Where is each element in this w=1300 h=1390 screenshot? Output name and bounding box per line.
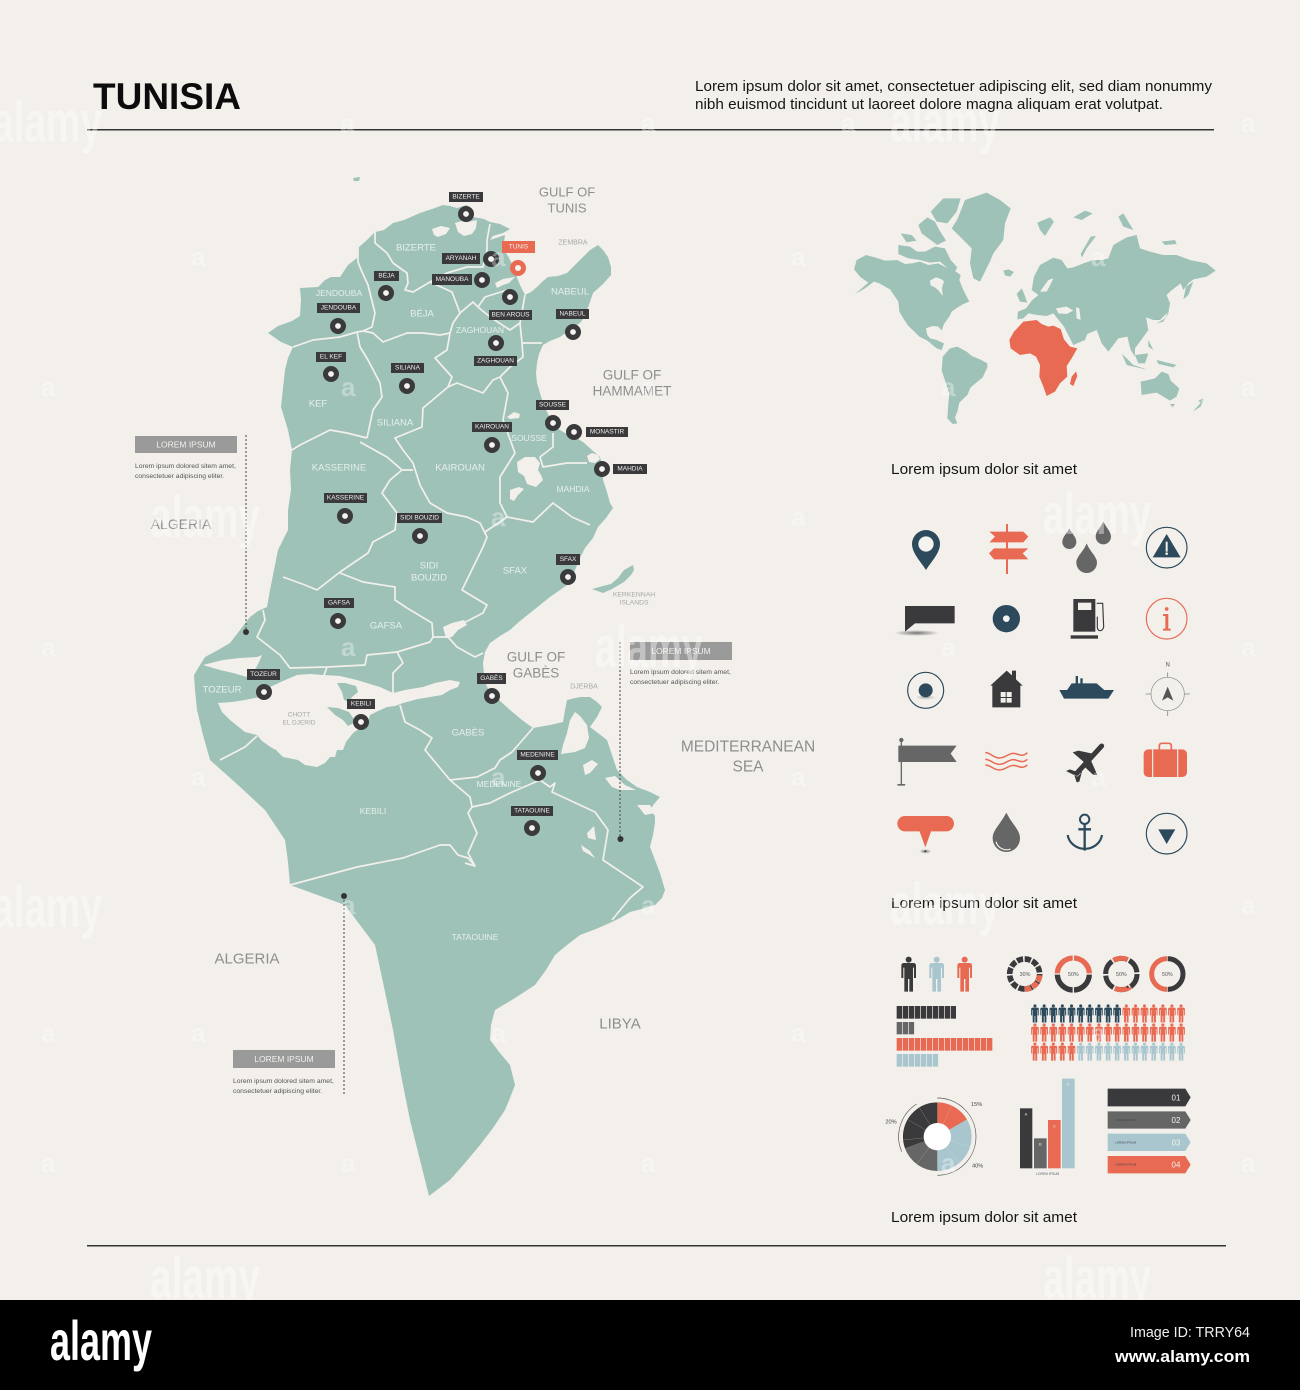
segmented bars bbox=[897, 1005, 992, 1067]
icon: target bbox=[908, 672, 944, 708]
marker: Ben Arous: BEN AROUS bbox=[492, 312, 530, 318]
marker: Manouba: MANOUBA bbox=[436, 276, 469, 283]
sea and neighbour names: KERKENNAH bbox=[613, 592, 655, 598]
intro text: nibh euismod tincidunt ut laoreet dolore magna aliquam erat volutpat. bbox=[695, 97, 1163, 113]
marker: Monastir bbox=[566, 424, 628, 440]
intro text: Lorem ipsum dolor sit amet, consectetuer adipiscing elit, sed diam nonummy bbox=[695, 79, 1213, 95]
footer bar bbox=[0, 1300, 1300, 1390]
watermarks: a bbox=[1241, 108, 1256, 138]
donut: 50% half: 50% bbox=[1162, 972, 1173, 978]
callout: east: consectetuer adipiscing eliter. bbox=[630, 679, 719, 686]
icon: fuel pump bbox=[1071, 599, 1104, 639]
watermarks: a bbox=[941, 632, 956, 662]
arrow 04 bbox=[1108, 1156, 1191, 1173]
icon: disc bbox=[993, 605, 1020, 632]
hudson bay bbox=[930, 277, 944, 296]
australia bbox=[1141, 372, 1203, 412]
callout: south bbox=[233, 893, 347, 1095]
people grid bbox=[1031, 1004, 1185, 1061]
region names: NABEUL bbox=[551, 286, 589, 298]
region names: SIDI bbox=[420, 560, 438, 572]
marker: Medenine: MEDENINE bbox=[520, 752, 555, 758]
marker: Sousse bbox=[536, 400, 569, 431]
icon: suitcase bbox=[1144, 743, 1187, 777]
sea and neighbour names: EL DJERID bbox=[282, 720, 316, 726]
arrow 03 bbox=[1108, 1134, 1191, 1151]
donut: 50% half bbox=[1152, 959, 1183, 989]
marker: Kasserine: KASSERINE bbox=[327, 494, 365, 502]
lakes and lagoons bbox=[432, 220, 655, 858]
sea and neighbour names: DJERBA bbox=[570, 684, 598, 690]
marker: Tunis capital bbox=[502, 241, 535, 276]
watermarks: a bbox=[491, 502, 506, 532]
south america bbox=[942, 347, 987, 424]
icon set bbox=[894, 522, 1190, 854]
caption: icons: Lorem ipsum dolor sit amet bbox=[891, 896, 1077, 912]
watermarks: alamy bbox=[595, 615, 703, 680]
watermarks: a bbox=[1091, 762, 1106, 792]
icon: flag bbox=[897, 738, 957, 786]
bar chart bbox=[1020, 1079, 1075, 1176]
marker: Mahdia bbox=[594, 461, 647, 477]
watermarks: alamy bbox=[890, 90, 1000, 155]
marker: Zaghouan: ZAGHOUAN bbox=[477, 358, 514, 364]
watermarks: a bbox=[641, 108, 656, 138]
region names: JENDOUBA bbox=[316, 288, 362, 298]
sea and neighbour names: GULF OF bbox=[539, 184, 595, 200]
footer image id: Image ID: TRRY64 bbox=[1130, 1324, 1250, 1341]
arrow 02: 02 bbox=[1172, 1116, 1181, 1125]
watermarks: a bbox=[41, 1148, 56, 1178]
region names: SFAX bbox=[503, 566, 528, 576]
donut: 50% six parts: 50% bbox=[1116, 972, 1127, 978]
watermarks: alamy bbox=[1043, 482, 1151, 547]
watermarks: a bbox=[941, 372, 956, 402]
watermarks: alamy bbox=[150, 485, 260, 550]
marker: Kairouan bbox=[472, 422, 512, 453]
inland seas bbox=[1040, 278, 1081, 320]
region names: SOUSSE bbox=[511, 433, 547, 443]
callout: south: consectetuer adipiscing eliter. bbox=[233, 1088, 322, 1095]
marker: Bizerte: BIZERTE bbox=[452, 194, 480, 200]
marker: Gafsa: GAFSA bbox=[328, 600, 351, 606]
sea and neighbour names: HAMMAMET bbox=[593, 384, 671, 398]
title: TUNISIA bbox=[93, 75, 241, 117]
world map bbox=[854, 193, 1216, 424]
marker: Beja: BÉJA bbox=[378, 270, 395, 280]
pie chart: 40% bbox=[972, 1163, 983, 1169]
donut: 50% four parts bbox=[1054, 955, 1093, 993]
watermarks: a bbox=[791, 242, 806, 272]
callout: north west: Lorem ipsum dolored sitem amet, bbox=[135, 463, 236, 470]
watermarks: a bbox=[341, 372, 356, 402]
numbered arrows bbox=[1108, 1089, 1191, 1173]
sea and neighbour names: ALGERIA bbox=[214, 950, 280, 968]
region names: KEBILI bbox=[360, 806, 386, 816]
marker: Sfax: SFAX bbox=[560, 556, 577, 563]
icon: compass: N bbox=[1165, 663, 1170, 669]
marker: Jendouba: JENDOUBA bbox=[321, 304, 357, 312]
icon: anchor bbox=[1068, 815, 1102, 851]
icon: plane bbox=[1066, 746, 1102, 782]
sea and neighbour names: MEDITERRANEAN bbox=[681, 738, 815, 756]
watermarks: a bbox=[941, 1148, 956, 1178]
sea and neighbour names: GULF OF bbox=[507, 650, 565, 664]
marker: Kebili: KEBILI bbox=[351, 700, 371, 708]
arrow 02 bbox=[1108, 1111, 1191, 1129]
callout: north west bbox=[135, 435, 249, 635]
bar chart: C bbox=[1053, 1123, 1056, 1128]
watermarks: a bbox=[1241, 1148, 1256, 1178]
marker: Kasserine bbox=[324, 493, 367, 524]
watermarks: a bbox=[341, 890, 356, 920]
footer logo: alamy bbox=[50, 1309, 152, 1372]
region names: TATAOUINE bbox=[452, 932, 499, 942]
sea and neighbour names: TUNIS bbox=[548, 200, 587, 216]
city markers bbox=[247, 192, 647, 836]
icon: signpost bbox=[989, 524, 1028, 574]
marker: Gabes: GABÈS bbox=[480, 673, 503, 682]
map: Tunisia bbox=[151, 177, 815, 1196]
marker: Nabeul bbox=[556, 309, 589, 340]
asia islands bbox=[1122, 282, 1193, 370]
watermarks: a bbox=[1091, 242, 1106, 272]
eurasia bbox=[1017, 235, 1216, 357]
watermarks: a bbox=[191, 1018, 206, 1048]
intro text bbox=[695, 79, 1213, 113]
watermarks: alamy bbox=[150, 1246, 260, 1311]
marker: El Kef bbox=[316, 352, 346, 382]
icon: drop bbox=[993, 813, 1020, 852]
africa bbox=[1009, 320, 1077, 396]
marker: Gafsa bbox=[324, 598, 354, 629]
region names: MEDENINE bbox=[477, 779, 522, 789]
watermarks: a bbox=[641, 1148, 656, 1178]
callout: east bbox=[618, 642, 732, 842]
pie chart bbox=[885, 1098, 983, 1175]
region names: ZAGHOUAN bbox=[456, 325, 504, 335]
marker: Beja bbox=[374, 270, 399, 301]
marker: Siliana bbox=[391, 363, 424, 394]
watermarks: a bbox=[491, 1018, 506, 1048]
people icons bbox=[901, 957, 972, 992]
watermarks: a bbox=[41, 1018, 56, 1048]
donut: 50% four parts: 50% bbox=[1068, 972, 1079, 978]
north america bbox=[854, 255, 969, 350]
callout: north west: consectetuer adipiscing eliter. bbox=[135, 473, 224, 480]
Chott inlets bbox=[327, 683, 358, 726]
marker: Ben Arous bbox=[489, 289, 532, 320]
region names: BÉJA bbox=[410, 308, 435, 320]
callout: south: Lorem ipsum dolored sitem amet, bbox=[233, 1078, 334, 1085]
icon: red balloon pin bbox=[897, 816, 954, 854]
callout: east: LOREM IPSUM bbox=[651, 646, 711, 656]
watermarks: a bbox=[491, 762, 506, 792]
icon: water drops bbox=[1062, 522, 1111, 573]
region names: GAFSA bbox=[370, 620, 403, 632]
watermarks: a bbox=[641, 890, 656, 920]
marker: Monastir: MONASTIR bbox=[590, 428, 624, 436]
arctic canada bbox=[898, 198, 961, 273]
marker: Nabeul: NABEUL bbox=[559, 310, 586, 318]
watermarks: a bbox=[340, 108, 355, 138]
bar chart: LOREM IPSUM bbox=[1036, 1172, 1060, 1176]
marker: Manouba bbox=[432, 272, 490, 288]
icon: house bbox=[990, 671, 1023, 707]
marker: Sousse: SOUSSE bbox=[539, 402, 567, 408]
donut: 50% six parts bbox=[1100, 953, 1143, 995]
region names: KEF bbox=[309, 398, 327, 410]
region names: BOUZID bbox=[411, 572, 447, 584]
callout: east: Lorem ipsum dolored sitem amet, bbox=[630, 669, 731, 676]
watermarks: alamy bbox=[890, 872, 1000, 937]
marker: Gabes bbox=[477, 673, 506, 704]
marker: Tozeur: TOZEUR bbox=[250, 671, 277, 678]
marker: Sidi Bouzid: SIDI BOUZID bbox=[400, 514, 439, 522]
marker: Mahdia: MAHDIA bbox=[617, 466, 643, 472]
watermarks: a bbox=[791, 762, 806, 792]
arrow 02: LOREM IPSUM bbox=[1115, 1118, 1137, 1122]
sea and neighbour names: LIBYA bbox=[599, 1016, 641, 1032]
callout: south: LOREM IPSUM bbox=[254, 1054, 314, 1064]
marker: Kairouan: KAIROUAN bbox=[475, 424, 509, 430]
region names: MAHDIA bbox=[556, 484, 590, 494]
icon: location pin bbox=[912, 530, 940, 570]
arrow 01: 01 bbox=[1172, 1093, 1181, 1102]
marker: Jendouba bbox=[317, 303, 360, 334]
marker: Tozeur bbox=[247, 669, 280, 700]
caption: infographics: Lorem ipsum dolor sit amet bbox=[891, 1210, 1077, 1226]
watermarks: a bbox=[791, 1018, 806, 1048]
watermarks: a bbox=[41, 372, 56, 402]
watermarks: a bbox=[841, 108, 856, 138]
watermarks: a bbox=[341, 1148, 356, 1178]
icon: warning bbox=[1146, 527, 1187, 568]
region names: BIZERTE bbox=[396, 242, 436, 254]
pie chart: 15% bbox=[971, 1102, 982, 1108]
icon: information bbox=[1146, 598, 1187, 639]
arrow 04: LOREM IPSUM bbox=[1115, 1163, 1137, 1167]
donut: 30% bbox=[1008, 958, 1041, 990]
icon: speech tag bbox=[894, 606, 955, 636]
region names bbox=[203, 242, 590, 942]
region names: TOZEUR bbox=[203, 684, 242, 696]
marker: Medenine bbox=[517, 750, 558, 781]
callout: north west: LOREM IPSUM bbox=[156, 440, 216, 450]
novaya zemlya bbox=[1081, 236, 1096, 257]
watermarks: a bbox=[1241, 890, 1256, 920]
region names: GABÈS bbox=[452, 728, 484, 738]
caption: world map: Lorem ipsum dolor sit amet bbox=[891, 462, 1077, 478]
Kerkennah islands bbox=[592, 565, 634, 593]
arrow 03: 03 bbox=[1172, 1138, 1181, 1147]
watermarks: a bbox=[191, 242, 206, 272]
regional borders bbox=[220, 224, 643, 920]
sea and neighbour names: GULF OF bbox=[603, 368, 661, 382]
watermarks: alamy bbox=[1043, 1246, 1151, 1311]
marker: Sfax bbox=[556, 554, 580, 585]
arrow 03: LOREM IPSUM bbox=[1115, 1140, 1137, 1144]
marker: Zaghouan bbox=[474, 335, 517, 366]
region names: KASSERINE bbox=[312, 462, 366, 474]
watermarks: a bbox=[641, 372, 656, 402]
icon: compass bbox=[1146, 663, 1190, 716]
region names: KAIROUAN bbox=[435, 462, 485, 474]
watermarks: a bbox=[1091, 1018, 1106, 1048]
sea and neighbour names: SEA bbox=[732, 758, 764, 776]
country landmass bbox=[194, 205, 665, 1196]
watermarks: a bbox=[191, 762, 206, 792]
Chott el Djerid bbox=[218, 674, 460, 767]
footer url: www.alamy.com bbox=[1114, 1347, 1250, 1366]
marker: Tataouine bbox=[511, 806, 553, 836]
sea and neighbour names bbox=[151, 184, 815, 1032]
sea and neighbour names: ALGERIA bbox=[151, 516, 212, 532]
watermarks: a bbox=[491, 242, 506, 272]
icon: ship bbox=[1059, 676, 1114, 699]
icon: waves bbox=[985, 753, 1027, 770]
marker: Tunis capital: TUNIS bbox=[509, 244, 529, 250]
marker: Kebili bbox=[347, 699, 375, 730]
bar chart: A bbox=[1025, 1111, 1028, 1116]
sea and neighbour names: CHOTT bbox=[288, 712, 310, 718]
watermarks: a bbox=[1241, 372, 1256, 402]
islet bbox=[353, 177, 360, 181]
arrow 04: 04 bbox=[1172, 1161, 1181, 1170]
marker: El Kef: EL KEF bbox=[320, 354, 342, 360]
icon: down circle bbox=[1146, 813, 1187, 854]
iceland uk svalbard bbox=[1003, 211, 1177, 303]
marker: Aryanah bbox=[442, 251, 499, 267]
bar chart: B bbox=[1039, 1141, 1042, 1146]
watermarks: a bbox=[41, 632, 56, 662]
region names: SILIANA bbox=[377, 418, 414, 428]
donut: 30%: 30% bbox=[1020, 972, 1031, 978]
watermarks: a bbox=[1241, 632, 1256, 662]
greenland bbox=[952, 193, 1011, 282]
bar chart: D bbox=[1067, 1082, 1070, 1087]
marker: Tataouine: TATAOUINE bbox=[514, 808, 551, 814]
infographic elements bbox=[885, 953, 1191, 1176]
pie chart: 20% bbox=[885, 1119, 897, 1125]
sea and neighbour names: GABÈS bbox=[513, 666, 559, 680]
sea and neighbour names: ISLANDS bbox=[619, 600, 649, 606]
marker: Siliana: SILIANA bbox=[395, 364, 421, 372]
Chott el Gharsa bbox=[203, 655, 262, 677]
marker: Aryanah: ARYANAH bbox=[446, 255, 477, 262]
marker: Bizerte bbox=[449, 192, 483, 222]
marker: Sidi Bouzid bbox=[397, 513, 442, 544]
watermarks: a bbox=[791, 502, 806, 532]
watermarks: a bbox=[341, 632, 356, 662]
sea and neighbour names: ZEMBRA bbox=[558, 240, 588, 246]
